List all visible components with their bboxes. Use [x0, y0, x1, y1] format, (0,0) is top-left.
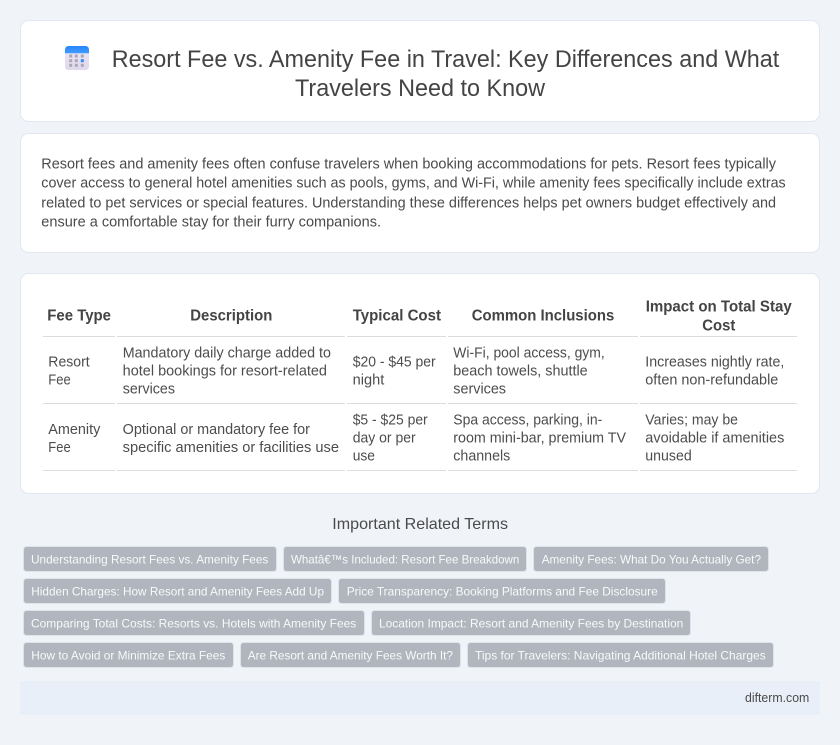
tag: [24, 546, 276, 572]
tag: Location Impact: Resort and Amenity Fees by Destination: [379, 616, 683, 630]
table header row: Description: [190, 308, 272, 325]
panel: title header: [20, 20, 820, 122]
heading: important related terms: Important Related Terms: [332, 516, 508, 533]
text block: introduction paragraph: ensure a comfortable stay for their furry companions.: [41, 215, 381, 231]
tag: How to Avoid or Minimize Extra Fees: [31, 648, 225, 662]
tag: [24, 610, 364, 636]
tag: [372, 610, 690, 636]
tag: [338, 578, 666, 604]
table row: amenity fee: room mini-bar, premium TV: [453, 431, 626, 447]
footer text: difterm.com: difterm.com: [745, 690, 809, 705]
table row: amenity fee: channels: [453, 449, 510, 465]
related term tags: [24, 546, 774, 668]
table row: amenity fee: Fee: [48, 440, 71, 456]
table header row: Fee Type: [47, 308, 111, 325]
table row: resort fee: hotel bookings for resort-related: [123, 363, 327, 379]
table row: amenity fee: day or per: [353, 431, 416, 447]
table row: resort fee: Fee: [48, 373, 71, 389]
table header row: Impact on Total Stay: [646, 299, 792, 316]
table row: resort fee: night: [353, 373, 384, 389]
table row: resort fee: Resort: [48, 355, 90, 371]
table row: resort fee: [48, 345, 784, 397]
tag: [24, 578, 332, 604]
tag: Are Resort and Amenity Fees Worth It?: [248, 648, 453, 662]
tag: Whatâ€™s Included: Resort Fee Breakdown: [291, 552, 519, 566]
tag: Price Transparency: Booking Platforms and Fee Disclosure: [347, 584, 658, 598]
tag: [534, 546, 768, 572]
table row: amenity fee: Varies; may be: [645, 413, 738, 429]
table row: amenity fee: $5 - $25 per: [353, 413, 428, 429]
footer: [20, 681, 820, 715]
table row: resort fee: Mandatory daily charge added to: [123, 345, 331, 361]
table header row: [47, 299, 792, 335]
tag: Hidden Charges: How Resort and Amenity Fees Add Up: [31, 584, 324, 598]
panel: comparison table: [20, 274, 820, 494]
table header row: Common Inclusions: [472, 308, 614, 325]
table row: amenity fee: [48, 413, 784, 465]
table row: amenity fee: specific amenities or facilities use: [123, 440, 339, 456]
panel: introduction: [20, 134, 820, 252]
tag: Amenity Fees: What Do You Actually Get?: [542, 552, 761, 566]
table row: resort fee: services: [123, 381, 175, 397]
tag: [24, 642, 234, 668]
table row: resort fee: $20 - $45 per: [353, 355, 436, 371]
title: [112, 46, 780, 102]
table row: amenity fee: use: [353, 449, 375, 465]
title: Resort Fee vs. Amenity Fee in Travel: Key Differences and What: [112, 46, 780, 73]
table row: resort fee: beach towels, shuttle: [453, 363, 588, 379]
table row: amenity fee: Spa access, parking, in-: [453, 413, 602, 429]
tag: Tips for Travelers: Navigating Additional Hotel Charges: [475, 648, 766, 662]
tag: [284, 546, 526, 572]
table row: amenity fee: avoidable if amenities: [645, 431, 784, 447]
text block: introduction paragraph: related to pet services or special features. Understanding these differences helps pet owners budget effectively and: [41, 195, 776, 211]
table row: resort fee: Increases nightly rate,: [645, 355, 784, 371]
icon: calendar: [65, 46, 89, 70]
tag: Understanding Resort Fees vs. Amenity Fees: [31, 552, 268, 566]
table header row: Typical Cost: [353, 308, 442, 325]
table row: resort fee: Wi-Fi, pool access, gym,: [453, 345, 605, 361]
text block: introduction paragraph: cover access to general hotel amenities such as pools, gyms, and Wi-Fi, while amenity fees specifically include extras: [41, 176, 786, 192]
tag: [468, 642, 774, 668]
title: Travelers Need to Know: [295, 75, 546, 102]
table row: resort fee: services: [453, 381, 506, 397]
text block: introduction paragraph: Resort fees and amenity fees often confuse travelers when booking accommodations for pets. Resort fees typically: [41, 156, 777, 172]
table row: amenity fee: Amenity: [48, 422, 101, 438]
tag: Comparing Total Costs: Resorts vs. Hotels with Amenity Fees: [31, 616, 356, 630]
table row: amenity fee: unused: [645, 449, 692, 465]
table row: resort fee: often non-refundable: [645, 373, 778, 389]
text block: introduction paragraph: [41, 156, 786, 231]
tag: [240, 642, 460, 668]
table row: amenity fee: Optional or mandatory fee for: [123, 422, 310, 438]
table header row: Cost: [702, 318, 736, 335]
